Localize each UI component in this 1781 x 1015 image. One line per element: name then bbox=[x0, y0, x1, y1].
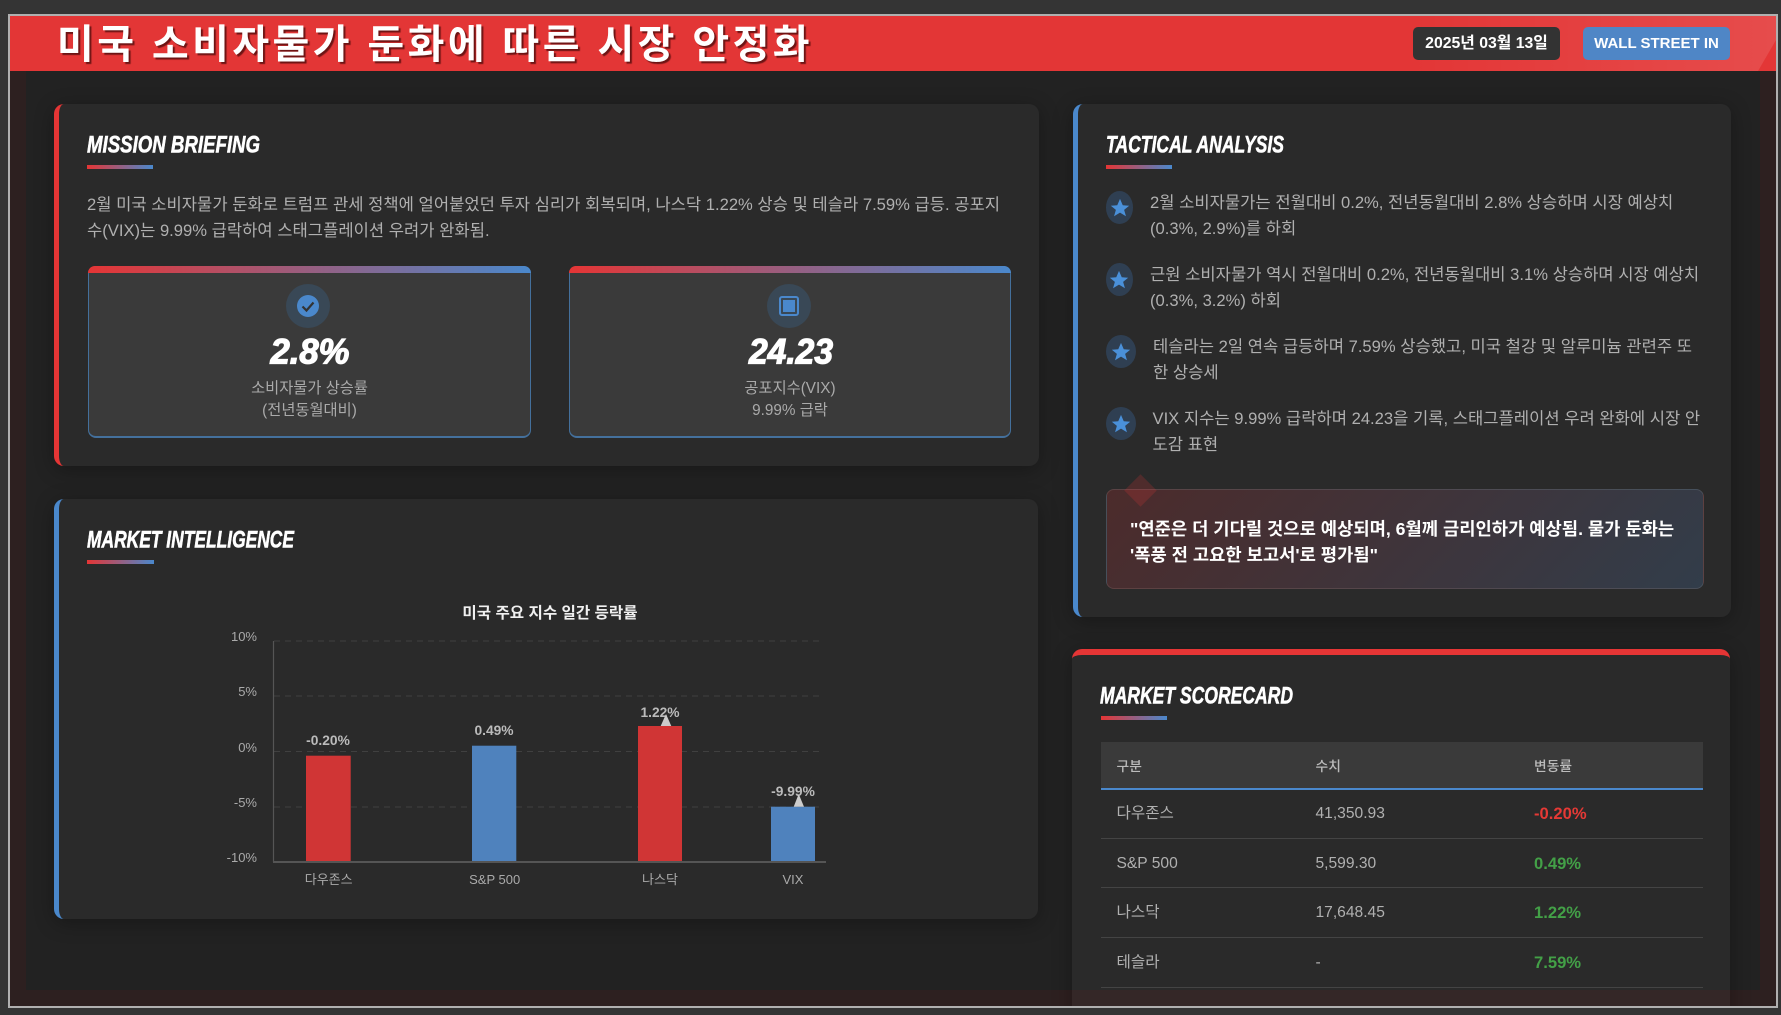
icon: square bbox=[767, 284, 811, 328]
source badge: WALL STREET IN bbox=[1594, 35, 1719, 52]
stat card: VIX bbox=[569, 266, 1011, 438]
item text: (0.3%, 2.9%)를 하회 bbox=[1150, 219, 1296, 238]
bar chart: daily index change bbox=[227, 604, 826, 886]
analysis item 3 bbox=[1106, 335, 1692, 380]
quote text bbox=[1130, 520, 1674, 563]
diamond accent bbox=[1124, 474, 1157, 507]
value labels: 1.22% bbox=[640, 705, 680, 720]
briefing text: 2월 미국 소비자물가 둔화로 트럼프 관세 정책에 얼어붙었던 투자 심리가 회복되며, 나스닥 1.22% 상승 및 테슬라 7.59% 급등. 공포지 bbox=[87, 195, 1000, 214]
y axis labels bbox=[227, 629, 257, 865]
date badge: 2025년 03월 13일 bbox=[1425, 35, 1548, 52]
heading underline bbox=[1100, 716, 1167, 720]
item text: 한 상승세 bbox=[1153, 363, 1219, 382]
panel: market intelligence bbox=[54, 499, 826, 919]
y axis labels: -10% bbox=[227, 850, 257, 865]
y axis labels: 0% bbox=[238, 740, 257, 755]
item text: 테슬라는 2일 연속 급등하며 7.59% 상승했고, 미국 철강 및 알루미늄 관련주 또 bbox=[1153, 337, 1692, 356]
y axis labels: -5% bbox=[234, 795, 257, 810]
value labels: -0.20% bbox=[306, 733, 350, 748]
scorecard table: 41,350.93 bbox=[1316, 805, 1385, 822]
heading underline bbox=[1106, 165, 1172, 169]
item text bbox=[1154, 338, 1692, 380]
analysis item 1 bbox=[1106, 191, 1672, 238]
axes bbox=[273, 641, 826, 862]
scorecard table: 나스닥 bbox=[1116, 904, 1160, 921]
item text: (0.3%, 3.2%) 하회 bbox=[1150, 291, 1281, 310]
icon: check circle bbox=[286, 284, 330, 328]
item text: 도감 표현 bbox=[1152, 435, 1218, 454]
header bar bbox=[10, 16, 1776, 71]
scorecard table: 17,648.45 bbox=[1316, 904, 1385, 921]
stat label: 9.99% 급락 bbox=[752, 402, 828, 419]
stat label: (전년동월대비) bbox=[262, 402, 357, 419]
analysis item 2 bbox=[1106, 263, 1697, 310]
peak markers bbox=[661, 714, 804, 807]
scorecard table: -0.20% bbox=[1534, 804, 1587, 823]
scorecard table: 1.22% bbox=[1534, 903, 1581, 922]
heading: tactical analysis: TACTICAL ANALYSIS bbox=[1106, 132, 1284, 158]
icon: star bbox=[1106, 263, 1133, 296]
heading: market scorecard: MARKET SCORECARD bbox=[1100, 682, 1293, 710]
category labels: 다우존스 bbox=[305, 872, 353, 887]
icon: star bbox=[1106, 191, 1133, 224]
briefing text: 수(VIX)는 9.99% 급락하여 스태그플레이션 우려가 완화됨. bbox=[87, 221, 490, 240]
heading underline bbox=[87, 165, 153, 169]
icon: star bbox=[1106, 335, 1136, 368]
item text bbox=[1150, 266, 1697, 310]
heading underline bbox=[87, 560, 154, 564]
value labels bbox=[306, 705, 815, 799]
value labels: -9.99% bbox=[771, 784, 815, 799]
panel: mission briefing bbox=[54, 104, 1039, 466]
item text bbox=[1152, 410, 1700, 452]
scorecard table: S&P 500 bbox=[1116, 855, 1178, 872]
stat label: 소비자물가 상승률 bbox=[251, 380, 368, 397]
quote text: "연준은 더 기다릴 것으로 예상되며, 6월께 금리인하가 예상됨. 물가 둔화는 bbox=[1130, 519, 1674, 539]
y axis labels: 5% bbox=[238, 684, 257, 699]
item text bbox=[1150, 194, 1672, 238]
scorecard table: 테슬라 bbox=[1116, 954, 1160, 971]
stat label: 공포지수(VIX) bbox=[744, 380, 836, 397]
heading: mission briefing: MISSION BRIEFING bbox=[87, 132, 260, 158]
title: 미국 소비자물가 둔화에 따른 시장 안정화 bbox=[57, 23, 813, 67]
scorecard table: 구분 bbox=[1116, 759, 1142, 774]
stat card: CPI bbox=[88, 266, 531, 438]
category labels: 나스닥 bbox=[642, 872, 678, 887]
panel: tactical analysis bbox=[1073, 104, 1731, 617]
item text: 근원 소비자물가 역시 전월대비 0.2%, 전년동월대비 3.1% 상승하며 시장 예상치 bbox=[1150, 265, 1699, 284]
scorecard table: - bbox=[1316, 954, 1321, 971]
heading: market intelligence: MARKET INTELLIGENCE bbox=[87, 526, 294, 554]
category labels: S&P 500 bbox=[469, 872, 520, 887]
bars bbox=[306, 726, 815, 861]
stat value: 2.8% bbox=[270, 332, 349, 372]
callout: quote bbox=[1106, 489, 1704, 589]
date badge bbox=[1413, 27, 1560, 60]
analysis item 4 bbox=[1106, 407, 1700, 452]
value labels: 0.49% bbox=[474, 723, 514, 738]
gradient stripe bbox=[569, 266, 1011, 273]
icon: star bbox=[1106, 407, 1136, 440]
source badge bbox=[1583, 27, 1730, 60]
item text: VIX 지수는 9.99% 급락하며 24.23을 기록, 스태그플레이션 우려 완화에 시장 안 bbox=[1152, 409, 1700, 428]
gradient stripe bbox=[88, 266, 531, 273]
chart title: 미국 주요 지수 일간 등락률 bbox=[462, 604, 638, 622]
scorecard table: 7.59% bbox=[1534, 953, 1581, 972]
stat label bbox=[745, 380, 835, 416]
scorecard table: 0.49% bbox=[1534, 854, 1581, 873]
scorecard table bbox=[1101, 742, 1703, 988]
item text: 2월 소비자물가는 전월대비 0.2%, 전년동월대비 2.8% 상승하며 시장 예상치 bbox=[1150, 193, 1673, 212]
stat value: 24.23 bbox=[748, 332, 834, 372]
briefing text bbox=[88, 196, 998, 240]
category labels bbox=[306, 873, 803, 886]
scorecard table: 5,599.30 bbox=[1316, 855, 1376, 872]
quote text: '폭풍 전 고요한 보고서'로 평가됨" bbox=[1130, 545, 1378, 565]
scorecard table: 변동률 bbox=[1534, 759, 1572, 774]
y axis labels: 10% bbox=[231, 629, 257, 644]
category labels: VIX bbox=[783, 872, 804, 887]
stat label bbox=[252, 380, 368, 418]
scorecard table: 다우존스 bbox=[1116, 805, 1174, 822]
panel: market scorecard bbox=[1072, 649, 1730, 1015]
scorecard table: 수치 bbox=[1316, 759, 1341, 774]
